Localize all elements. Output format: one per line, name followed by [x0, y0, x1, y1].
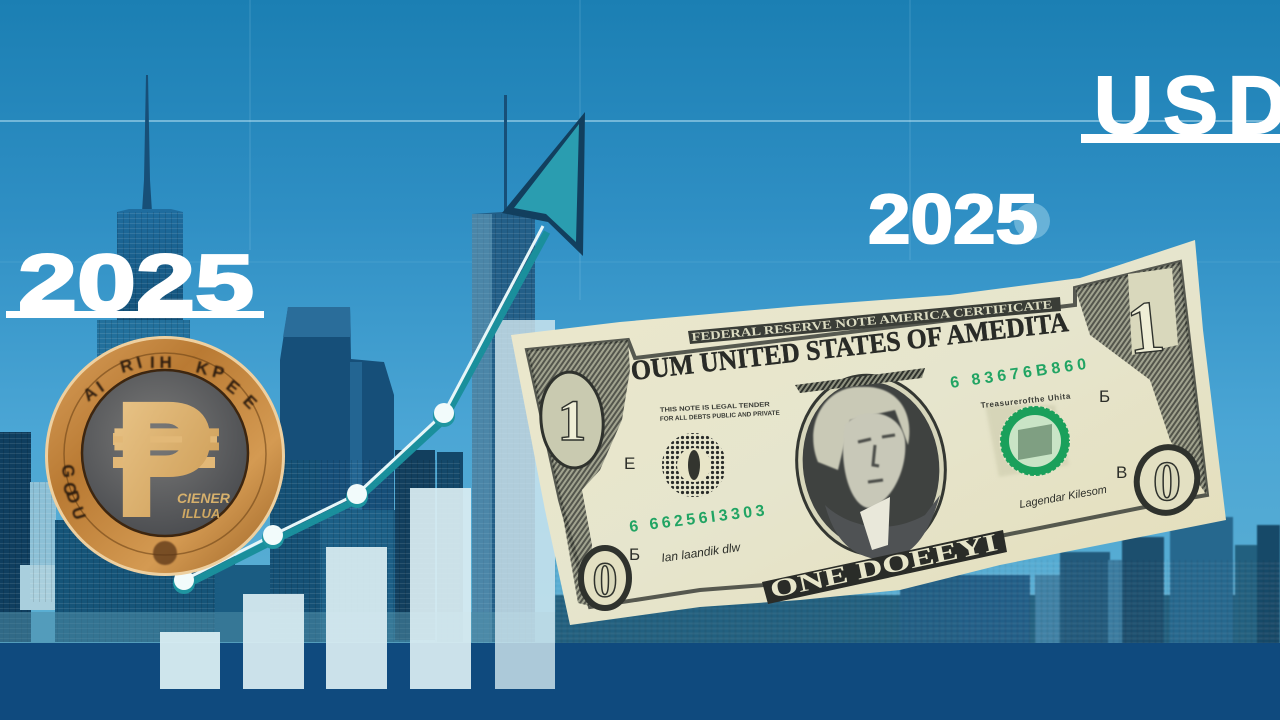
- right skyline: [555, 517, 1280, 644]
- bill header band: FEDERAL RESERVE NOTE AMERICA CERTIFICATE: [691, 297, 1053, 344]
- bar 1: [160, 632, 220, 689]
- ground band: [0, 643, 1280, 720]
- right year label: 2025: [868, 180, 1038, 258]
- coin peso symbol: ₱: [109, 371, 219, 555]
- coin rim lettering: E: [239, 391, 261, 413]
- left year label: [6, 238, 264, 327]
- bill paper: [511, 240, 1226, 625]
- left spire tower: [97, 75, 190, 640]
- left numeral 1: 1: [558, 388, 586, 453]
- growth line with arrow: [173, 112, 585, 594]
- white line: [184, 226, 543, 580]
- coin small text: CIENER: [177, 490, 231, 506]
- bill heading: OUM UNITED STATES OF AMEDITA: [629, 307, 1071, 387]
- coin rim lettering: I H: [150, 353, 172, 372]
- hair: [813, 387, 909, 470]
- coin rim lettering: E: [223, 376, 243, 398]
- bottom corner zeros: [581, 440, 1205, 608]
- bill small legal text: [660, 401, 781, 423]
- teal line shadow: [184, 232, 547, 586]
- coin small text line 2: ILLUA: [182, 506, 220, 521]
- seal: [985, 405, 1070, 477]
- center glass building: [280, 307, 394, 640]
- background grid lines: [0, 0, 1280, 300]
- right numeral 1: 1: [1123, 285, 1168, 371]
- coin emblem: [153, 541, 177, 565]
- coin rim lettering: G O: [58, 464, 80, 496]
- bottom banner: [762, 530, 1007, 604]
- shirt: [860, 497, 890, 550]
- left ornament: [527, 340, 630, 606]
- bar chart: [160, 320, 555, 689]
- bill letter 6 left: Б: [629, 545, 640, 564]
- green serial left: 6 66256I3303: [628, 503, 766, 536]
- bottom denomination: ONE DOEEYI: [768, 529, 1000, 604]
- seal caption: Treasurerofthe Uhita: [980, 392, 1071, 410]
- corner numeral left: 0: [592, 551, 618, 607]
- right spire tower: [472, 95, 535, 644]
- bill small legal text: FOR ALL DEBTS PUBLIC AND PRIVATE: [660, 410, 781, 423]
- bill letter B: B: [1116, 463, 1127, 482]
- arrow head: [502, 112, 585, 256]
- peso coin: [45, 336, 285, 576]
- city skyline: [0, 75, 1280, 644]
- coin rim lettering: K P: [194, 358, 226, 383]
- bar 3: [326, 547, 387, 689]
- bar 5: [495, 320, 555, 689]
- face: [843, 413, 905, 508]
- bar 4: [410, 488, 471, 689]
- corner numeral right: 0: [1153, 451, 1181, 513]
- low-rise strip: [0, 612, 560, 644]
- left edge buildings: [0, 432, 463, 642]
- coin rim lettering: [58, 353, 261, 522]
- bill small legal text: THIS NOTE IS LEGAL TENDER: [660, 401, 770, 414]
- bill engraved frame: [527, 262, 1207, 607]
- green serial right: 6 83676B860: [949, 356, 1087, 392]
- bill letter E: E: [624, 454, 635, 473]
- coin rim lettering: A I: [79, 378, 108, 405]
- right ornament: [1075, 262, 1207, 495]
- data points: [173, 403, 455, 594]
- bill header band: [688, 297, 1061, 344]
- signature left: Ian laandik dlw: [660, 540, 742, 565]
- rosette: [662, 433, 726, 497]
- dollar bill: [511, 240, 1226, 625]
- coat: [825, 495, 940, 560]
- bill letter 6 right: Б: [1099, 387, 1110, 406]
- left year label: 2025: [18, 238, 254, 327]
- coin rim lettering: D U: [62, 488, 89, 522]
- coin rim lettering: R I: [118, 353, 144, 377]
- signature right: Lagendar Kilesom: [1018, 484, 1108, 511]
- bar 2: [243, 594, 304, 689]
- portrait: [785, 366, 957, 564]
